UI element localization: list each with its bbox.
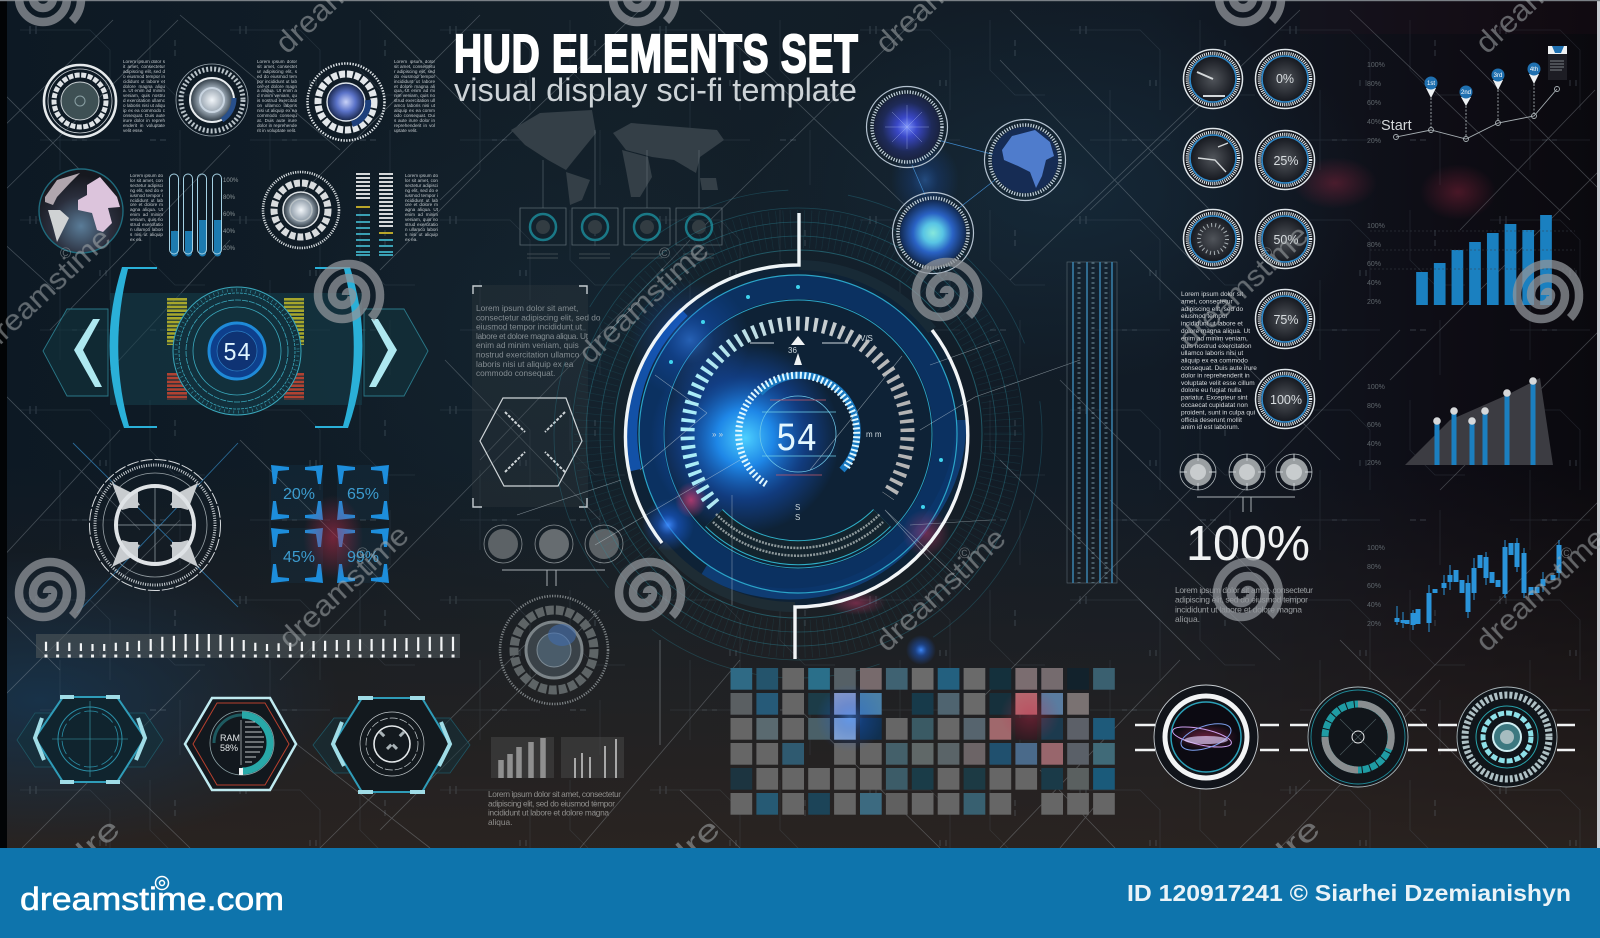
title main line: HUD ELEMENTS SET — [454, 23, 858, 83]
vertical data strips — [1067, 262, 1117, 583]
dotted bar chart: 60% — [1367, 422, 1381, 429]
bar chart — [1367, 215, 1575, 306]
right text column: aliquip ex ea commodo — [1181, 358, 1248, 365]
lower centre text: Lorem ipsum dolor sit amet, consectetur — [488, 789, 621, 799]
compass marks and labels: V/S — [860, 334, 873, 343]
left chevron — [74, 319, 102, 387]
red centre glow — [303, 495, 363, 579]
right text column: consequat. Duis aute irure — [1181, 365, 1257, 372]
percent labels: 20% — [283, 486, 315, 503]
candlestick chart: 20% — [1367, 621, 1381, 628]
hexagon gauge 2 RAM: 58% — [220, 743, 238, 753]
candlestick chart: 100% — [1367, 545, 1385, 552]
right text column: eiusmod tempor — [1181, 313, 1228, 320]
bar chart: 20% — [1367, 299, 1381, 306]
footer banner — [0, 848, 1600, 938]
left bracket — [109, 267, 157, 428]
percent gauge 50% — [1256, 210, 1314, 268]
brand name: dreamstime.com — [20, 881, 284, 917]
panel text: labore et dolore magna aliqua. Ut — [476, 331, 589, 341]
planet connectors and glow — [891, 140, 995, 220]
radar rings — [173, 287, 301, 415]
lower centre text: adipiscing elit, sed do eiusmod tempor — [488, 798, 615, 808]
lower centre text — [488, 789, 621, 827]
axis labels: 20% — [1367, 138, 1381, 145]
start label: Start — [1381, 118, 1412, 134]
dotted bar chart — [1367, 377, 1553, 467]
axis labels: 60% — [1367, 100, 1381, 107]
watermark words: dre — [60, 812, 127, 877]
bar chart: 80% — [1367, 242, 1381, 249]
panel text: eiusmod tempor incididunt ut — [476, 322, 583, 332]
panel text: enim ad minim veniam, quis — [476, 340, 579, 350]
candlestick chart: 60% — [1367, 583, 1381, 590]
panel text — [476, 303, 601, 378]
band and hexagons — [43, 293, 428, 405]
speedometer gauge 1 — [1184, 50, 1242, 108]
tube level chart: 80% — [223, 195, 236, 201]
percent labels: 45% — [283, 549, 315, 566]
panel text: commodo consequat. — [476, 368, 555, 378]
percent gauge 100% — [1256, 370, 1314, 428]
world map — [511, 110, 724, 205]
tube level chart: 20% — [223, 246, 236, 252]
dotted bar chart: 80% — [1367, 403, 1381, 410]
compass marks and labels — [712, 334, 882, 522]
watermark words: © — [357, 545, 368, 562]
pins: 2nd — [1461, 90, 1471, 96]
watermark spirals — [19, 0, 1579, 617]
four small map indicators — [520, 130, 722, 258]
right text column — [1181, 291, 1257, 431]
radar core with number: 54 — [223, 338, 251, 368]
speedometer gauge 3 — [1184, 210, 1242, 268]
level stripes — [356, 174, 393, 255]
HUD circle 4 — [263, 172, 339, 248]
slider strip — [36, 634, 460, 658]
top-left HUD circle 3 — [308, 64, 384, 140]
pins — [1424, 62, 1540, 106]
percent gauge 0%: 0% — [1276, 72, 1294, 86]
right chevron — [369, 319, 397, 387]
hexagon with arrows — [480, 398, 582, 486]
panel text: nostrud exercitation ullamco — [476, 350, 580, 360]
lower right text — [1175, 585, 1313, 624]
text panel with hexagon — [472, 285, 601, 507]
panel: main HUD — [517, 190, 1080, 745]
lower right text: aliqua. — [1175, 614, 1200, 624]
centre number: 54 — [776, 418, 817, 463]
percent gauge 100%: 100% — [1270, 393, 1302, 407]
right text column: incididunt ut labore et — [1181, 321, 1243, 328]
level bars yellow and red — [177, 298, 294, 400]
right bracket — [315, 267, 363, 428]
right text column: dolor in reprehenderit in — [1181, 372, 1250, 379]
right text column: dolore magna aliqua. Ut — [1181, 328, 1250, 335]
percent labels — [283, 486, 379, 566]
lower right text: Lorem ipsum dolor sit amet, consectetur — [1175, 585, 1313, 595]
right text column: Lorem ipsum dolor sit — [1181, 291, 1243, 298]
bottom circle 3 rings — [1457, 687, 1557, 787]
blue corner brackets — [271, 465, 389, 583]
compass marks and labels: 36 — [788, 346, 797, 355]
white arc right — [795, 330, 968, 659]
brand spiral mark — [156, 876, 168, 890]
lower right text: incididunt ut labore et dolore magna — [1175, 604, 1302, 614]
axis labels: 80% — [1367, 81, 1381, 88]
pins: 1st — [1427, 81, 1435, 87]
percent gauge 25% — [1256, 130, 1314, 190]
title subtitle: visual display sci-fi template — [454, 72, 857, 108]
panel text: laboris nisi ut aliquip ex ea — [476, 359, 574, 369]
panel text: consectetur adipiscing elit, sed do — [476, 312, 601, 322]
planet circle 2 globe — [984, 120, 1066, 200]
right text column: officia deserunt mollit — [1181, 417, 1242, 424]
compass marks and labels: S — [795, 503, 800, 512]
bottom circle 2 progress — [1308, 687, 1408, 787]
hexagon gauge 2 RAM: RAM — [220, 733, 240, 743]
top text column 3: Lorem ipsum dolor sit amet, consectetur adipiscing elit, sed do eiusmod tempor incididunt ut labore et dolore magna aliqua. Ut enim ad minim veniam, quis nostrud exercitation ullamco laboris nisi ut aliquip ex ea commodo consequat. Duis aute irure dolor in reprehenderit in voluptate velit. — [394, 60, 435, 133]
watermark words: © — [659, 245, 670, 262]
directional circle — [73, 443, 238, 613]
speedometer gauge 2 — [1184, 128, 1242, 188]
gauge tick ring — [688, 323, 908, 505]
percent labels: 65% — [347, 486, 379, 503]
three small grey circles with connector — [484, 525, 623, 586]
corner brackets — [473, 286, 587, 507]
percent gauge 25%: 25% — [1273, 154, 1299, 168]
compass marks and labels: m m — [866, 430, 882, 439]
panel text: Lorem ipsum dolor sit amet, — [476, 303, 578, 313]
planet circle 3 — [892, 192, 974, 274]
watermark words: dreamstime — [1172, 218, 1315, 355]
percent gauge 75%: 75% — [1273, 313, 1299, 327]
lower right text: adipiscing elit, sed do eiusmod tempor — [1175, 595, 1308, 605]
bottom circle 1 swirl — [1154, 685, 1258, 789]
bar chart: 40% — [1367, 280, 1381, 287]
hexagon gauge 3 — [313, 698, 470, 792]
dotted bar chart: 40% — [1367, 441, 1381, 448]
dotted bar chart: 100% — [1367, 384, 1385, 391]
side dashes for bottom circles — [1135, 725, 1575, 750]
dark disc — [627, 264, 969, 606]
tube level chart — [170, 174, 239, 257]
watermark words: © — [1261, 245, 1272, 262]
white arc left — [625, 213, 799, 543]
inner tick ring — [739, 375, 857, 484]
tile grid — [730, 668, 1115, 815]
lower centre text: aliqua. — [488, 817, 512, 827]
right text column: adipiscing elit, sed do — [1181, 306, 1244, 313]
top text column 1: Lorem ipsum dolor sit amet, consectetur adipiscing elit, sed do eiusmod tempor incididunt ut labore et dolore magna aliqua. Ut enim ad minim veniam, quis nostrud exercitation ullamco laboris nisi ut aliquip ex ea commodo consequat. Duis aute irure dolor in reprehenderit in voluptate velit esse. — [123, 60, 165, 133]
candlestick chart: 80% — [1367, 564, 1381, 571]
big percent value: 100% — [1186, 517, 1310, 571]
top-left HUD circle 2 — [176, 64, 248, 136]
dotted bar chart: 20% — [1367, 460, 1381, 467]
tube level chart: 100% — [223, 178, 239, 184]
watermark words: dreamstime — [272, 518, 415, 655]
percent gauge 75% — [1256, 290, 1314, 348]
percent gauge 0% — [1256, 50, 1314, 108]
watermark words: dre — [660, 812, 727, 877]
small bar charts — [491, 737, 624, 778]
right text column: occaecat cupidatat non — [1181, 402, 1248, 409]
candlestick chart — [1367, 538, 1559, 632]
three light circles with connector — [1180, 454, 1312, 512]
watermark words: © — [959, 545, 970, 562]
compass marks and labels: S — [795, 513, 800, 522]
image id and credit: ID 120917241 © Siarhei Dzemianishyn — [1127, 880, 1571, 906]
line chart with pins — [1367, 46, 1567, 145]
tube level chart: 60% — [223, 212, 236, 218]
title — [454, 23, 858, 108]
accent glows — [642, 482, 950, 665]
percent gauge 50%: 50% — [1273, 233, 1299, 247]
bottom striped band — [713, 514, 883, 556]
panel: wide radar HUD — [43, 267, 428, 428]
top-left HUD circle 1 — [44, 65, 116, 137]
bar chart: 100% — [1367, 223, 1385, 230]
central blue glow — [630, 280, 840, 533]
planet circle 1 — [866, 86, 948, 168]
bar chart: 60% — [1367, 261, 1381, 268]
radar core with number — [209, 323, 265, 379]
network lines — [517, 300, 1080, 745]
outer thin rings — [554, 190, 1042, 678]
watermark words: © — [1561, 545, 1572, 562]
right text column: enim ad minim veniam, — [1181, 335, 1248, 342]
compass marks and labels: » » — [712, 430, 724, 439]
percent brackets — [271, 465, 389, 583]
lower centre text: incididunt ut labore et dolore magna — [488, 808, 609, 818]
text right of stripes: Lorem ipsum dolor sit amet, consectetur adipiscing elit, sed do eiusmod tempor incididunt ut labore et dolore magna aliqua. Ut enim ad minim veniam, quis nostrud exercitation ullamco laboris nisi ut aliquip ex ea. — [405, 174, 438, 242]
axis labels: 40% — [1367, 119, 1381, 126]
pins: 4th — [1530, 67, 1538, 73]
axis labels: 100% — [1367, 62, 1385, 69]
watermark words: dre — [1260, 812, 1327, 877]
right text column: quis nostrud exercitation — [1181, 343, 1252, 350]
top text column 2: Lorem ipsum dolor sit amet, consectetur adipiscing elit, sed do eiusmod tempor incididunt ut labore et dolore magna aliqua. Ut enim ad minim veniam, quis nostrud exercitation ullamco laboris nisi ut aliquip ex ea commodo consequat. Duis aute irure dolor in reprehenderit in voluptate velit. — [257, 60, 297, 133]
right text column: pariatur. Excepteur sint — [1181, 395, 1248, 402]
tube level chart: 40% — [223, 229, 236, 235]
grey gauge — [500, 596, 608, 704]
panel background — [472, 285, 588, 507]
pins: 3rd — [1494, 73, 1502, 79]
axis labels — [1367, 62, 1385, 145]
hexagon gauge 1 — [17, 697, 163, 782]
text beside globe: Lorem ipsum dolor sit amet, consectetur adipiscing elit, sed do eiusmod tempor incididunt ut labore et dolore magna aliqua. Ut enim ad minim veniam, quis nostrud exercitation ullamco laboris nisi ut aliquip ex ea. — [130, 174, 163, 242]
right text column: anim id est laborum. — [1181, 424, 1240, 431]
small info box — [1548, 46, 1567, 80]
blue band — [632, 265, 961, 607]
percent labels: 99% — [347, 549, 379, 566]
cyan markers — [669, 285, 943, 509]
globe — [39, 169, 123, 253]
right text column: dolore eu fugiat nulla — [1181, 387, 1242, 394]
watermark words: dreamstime — [572, 233, 715, 370]
right text column: proident, sunt in culpa qui — [1181, 409, 1255, 416]
candlestick chart: 40% — [1367, 602, 1381, 609]
right text column: amet, consectetur — [1181, 298, 1233, 305]
watermark words: © — [60, 245, 71, 262]
watermark words: dreamstime — [869, 521, 1012, 658]
right text column: voluptate velit esse cillum — [1181, 380, 1255, 387]
hexagon gauge 2 RAM — [185, 698, 296, 790]
right text column: ullamco laboris nisi ut — [1181, 350, 1243, 357]
polyline nodes — [1394, 84, 1560, 142]
